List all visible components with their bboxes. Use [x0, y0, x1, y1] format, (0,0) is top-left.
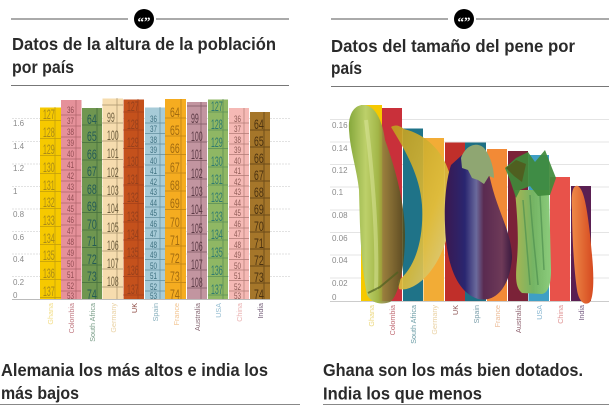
bar: USA: 132 [211, 191, 223, 206]
heading: height data [12, 34, 276, 77]
bar: Ghana: 135 [43, 249, 55, 264]
bar: Colombia: 53 [67, 291, 74, 301]
bar: USA: 131 [211, 173, 223, 188]
bar: USA: 129 [211, 136, 223, 151]
bar: Australia: 108 [191, 276, 203, 291]
bar: UK: 134 [127, 228, 139, 243]
bar: South Africa: 74 [87, 287, 97, 303]
bar: Germany: 101 [107, 147, 119, 162]
bar: Spain: 53 [150, 291, 157, 301]
y axis labels: 0.02 [332, 279, 348, 288]
bar: Colombia: 48 [67, 237, 74, 247]
caption: most and least [323, 360, 583, 404]
bar: USA: 137 [211, 283, 223, 298]
bar: Colombia [61, 100, 82, 301]
bar: Australia: 104 [191, 203, 203, 218]
bar: India: 64 [254, 117, 264, 133]
icon: eggplant [445, 145, 512, 300]
bar: Spain: 39 [150, 145, 157, 155]
bar: UK: 129 [127, 136, 139, 151]
bar: Spain: 37 [150, 124, 157, 134]
bar: France: 67 [170, 160, 180, 176]
bar: France: 71 [170, 233, 180, 249]
caption: most and least: Ghana son los más bien dotados. [323, 360, 583, 380]
bar: South Africa: 70 [87, 217, 97, 233]
bar: India [250, 112, 270, 303]
bar: Spain: 52 [150, 282, 157, 292]
bar: Colombia: 36 [67, 105, 74, 115]
country labels: size chart: Colombia [388, 305, 397, 335]
y axis labels: 1.4 [13, 142, 25, 151]
bar: Ghana: 128 [43, 126, 55, 141]
bar: Spain: 36 [150, 114, 157, 124]
bar: Spain: 51 [150, 271, 157, 281]
panel: height by country [0, 9, 300, 404]
caption: tallest and shortest: Alemania los más altos e india los [1, 360, 268, 380]
country labels: size chart: Australia [514, 305, 523, 333]
bar: Spain: 42 [150, 177, 157, 187]
bar: China: 42 [234, 177, 241, 187]
bar: Australia [187, 102, 207, 300]
bar: China: 40 [234, 156, 241, 166]
bar: France: 64 [170, 105, 180, 121]
y axis labels [13, 119, 25, 300]
bar: Colombia: 45 [67, 204, 74, 214]
y axis labels: 0.04 [332, 256, 348, 265]
bar: USA: 134 [211, 228, 223, 243]
bar: UK: 135 [127, 246, 139, 261]
bar: Australia: 102 [191, 167, 203, 182]
bar: France: 66 [170, 141, 180, 157]
panel: size by country [323, 9, 609, 404]
bar: China: 39 [234, 145, 241, 155]
bar: China: 49 [234, 250, 241, 260]
bar: Colombia: 42 [67, 171, 74, 181]
bar: Colombia: 49 [67, 248, 74, 258]
bar: South Africa: 71 [87, 234, 97, 250]
bar: Spain: 47 [150, 229, 157, 239]
divider with quote badge [11, 9, 289, 29]
bar: China: 41 [234, 166, 241, 176]
bar: Australia: 103 [191, 185, 203, 200]
bar: USA: 130 [211, 155, 223, 170]
country labels: size chart [367, 305, 586, 344]
country labels: height chart: Ghana [46, 303, 55, 325]
bar: Australia: 100 [191, 130, 203, 145]
y axis labels: 0 [332, 293, 337, 302]
bar: Germany: 107 [107, 257, 119, 272]
bar: South Africa: 72 [87, 252, 97, 268]
bars [361, 105, 591, 301]
bar: Australia: 107 [191, 258, 203, 273]
bar: UK: 136 [127, 264, 139, 279]
country labels: height chart: UK [130, 303, 139, 313]
caption: tallest and shortest [1, 360, 268, 403]
bar: Germany: 103 [107, 184, 119, 199]
bar: Ghana: 131 [43, 179, 55, 194]
bar: China: 46 [234, 219, 241, 229]
bar: Germany: 100 [107, 129, 119, 144]
bar: Spain: 46 [150, 219, 157, 229]
bar: Colombia: 44 [67, 193, 75, 203]
caption: tallest and shortest: más bajos [1, 383, 79, 403]
y axis labels: 0.12 [332, 166, 348, 175]
bar: Spain [145, 107, 165, 301]
bar: South Africa: 67 [87, 164, 97, 180]
bar: South Africa [82, 108, 102, 303]
bar: France: 69 [170, 196, 180, 212]
bar: Spain: 40 [150, 156, 157, 166]
divider with quote badge [331, 9, 609, 29]
y axis labels: 0.1 [332, 188, 344, 197]
bar: Colombia: 38 [67, 127, 74, 137]
icon: cucumber [349, 105, 405, 304]
bar: India: 71 [254, 236, 264, 252]
bar: South Africa: 66 [87, 147, 97, 163]
country labels: height chart: Colombia [67, 303, 76, 333]
icon: banana [391, 126, 452, 289]
bar: Germany [102, 98, 123, 300]
bar: Germany: 99 [107, 111, 115, 126]
country labels: height chart: Australia [193, 303, 202, 331]
bar: China: 52 [234, 282, 241, 292]
bar: China: 36 [234, 114, 241, 124]
bar: India: 72 [254, 253, 264, 269]
bar: China: 48 [234, 240, 241, 250]
bar: Spain: 45 [150, 208, 157, 218]
bar: USA [208, 99, 228, 300]
bar: Colombia: 50 [67, 259, 74, 269]
country labels: size chart: UK [451, 305, 460, 315]
bar: Ghana: 130 [43, 161, 55, 176]
y axis labels: 0.2 [13, 278, 25, 287]
country labels: height chart: South Africa [88, 303, 97, 342]
y axis labels: 1.2 [13, 164, 25, 173]
bar: UK: 130 [127, 155, 139, 170]
heading: height data: Datos de la altura de la población [12, 34, 276, 54]
bar: China: 51 [234, 271, 241, 281]
bar: China: 37 [234, 124, 241, 134]
bar: UK [123, 99, 144, 300]
bar: Spain: 41 [150, 166, 157, 176]
bar: Australia: 105 [191, 222, 203, 237]
bar: China: 53 [234, 291, 241, 301]
bar: Spain: 50 [150, 261, 157, 271]
y axis labels: 0.06 [332, 234, 348, 243]
bar: India: 65 [254, 134, 264, 150]
bar: China: 38 [234, 135, 241, 145]
y axis labels: 1 [13, 187, 18, 196]
country labels: height chart [46, 303, 265, 342]
bar: USA: 133 [211, 210, 223, 225]
country labels: size chart: USA [535, 305, 544, 320]
y axis labels [332, 121, 348, 302]
bar: India: 68 [254, 185, 264, 201]
bar: China: 43 [234, 187, 241, 197]
bar: China [229, 108, 249, 301]
bar: South Africa: 65 [87, 129, 97, 145]
y axis labels: 1.6 [13, 119, 25, 128]
icon: carrot [572, 186, 593, 304]
bar: Colombia: 41 [67, 160, 74, 170]
bar: UK: 133 [127, 210, 139, 225]
bar: Germany: 104 [107, 202, 119, 217]
bar: UK: 132 [127, 191, 139, 206]
bar: Ghana: 137 [43, 285, 55, 300]
bar: France: 68 [170, 178, 180, 194]
bar: USA: 128 [211, 118, 223, 133]
bar: India: 67 [254, 168, 264, 184]
y axis labels: 0.08 [332, 211, 348, 220]
bar: UK: 137 [127, 283, 139, 298]
heading: size data: Datos del tamaño del pene por [331, 36, 575, 56]
country labels: size chart: South Africa [409, 305, 418, 344]
country labels: size chart: Ghana [367, 305, 376, 327]
bar: Colombia: 40 [67, 149, 74, 159]
bar: Colombia: 39 [67, 138, 74, 148]
country labels: height chart: China [235, 303, 244, 322]
bar: Ghana: 127 [43, 108, 55, 123]
bar: South Africa: 64 [87, 112, 97, 128]
bar: France: 65 [170, 123, 180, 139]
bar: USA: 136 [211, 264, 223, 279]
bar: Colombia: 47 [67, 226, 74, 236]
bar: India: 69 [254, 202, 264, 218]
country labels: height chart: USA [214, 303, 223, 318]
bar: France: 72 [170, 251, 180, 267]
bar: China: 47 [234, 229, 241, 239]
bar: South Africa: 69 [87, 199, 97, 215]
bar: South Africa: 68 [87, 182, 97, 198]
bar: France: 70 [170, 215, 180, 231]
heading: size data: país [331, 58, 362, 78]
bar: Colombia: 37 [67, 116, 74, 126]
divider with quote badge: “” [138, 14, 150, 29]
bar: Spain: 38 [150, 135, 157, 145]
bar: India: 74 [254, 287, 264, 303]
country labels: size chart: France [493, 305, 502, 327]
country labels: height chart: Germany [109, 303, 118, 333]
bar: Australia: 99 [191, 112, 199, 127]
bar: India: 66 [254, 151, 264, 167]
bar: India: 70 [254, 219, 264, 235]
y axis labels: 0.6 [13, 233, 25, 242]
bar: France [165, 99, 186, 303]
country labels: height chart: India [256, 303, 265, 319]
country labels: height chart: Spain [151, 303, 160, 321]
icon: celery [505, 150, 556, 294]
bar: Australia: 101 [191, 148, 203, 163]
divider with quote badge: “” [458, 14, 470, 29]
bar: France: 73 [170, 269, 180, 285]
bar: China: 50 [234, 261, 241, 271]
bar: Spain: 48 [150, 240, 157, 250]
bar: UK: 131 [127, 173, 139, 188]
bar: UK: 128 [127, 118, 139, 133]
bar: Australia: 106 [191, 240, 203, 255]
bar: Ghana: 132 [43, 196, 55, 211]
y axis labels: 0.14 [332, 144, 348, 153]
bar: USA: 127 [211, 100, 223, 115]
heading: size data [331, 36, 575, 78]
bar: Ghana: 129 [43, 143, 55, 158]
y axis labels: 0.4 [13, 255, 25, 264]
bar: Colombia: 52 [67, 281, 74, 291]
bar: France: 74 [170, 287, 180, 303]
bar: Spain: 49 [150, 250, 157, 260]
bar: Germany: 106 [107, 239, 119, 254]
bar: Colombia: 51 [67, 270, 74, 280]
bar: Germany: 108 [107, 275, 119, 290]
y axis labels: 0.16 [332, 121, 348, 130]
bar: Colombia: 46 [67, 215, 74, 225]
bar: Ghana: 134 [43, 232, 55, 247]
heading: height data: por país [12, 57, 74, 77]
caption: most and least: India los que menos [323, 384, 482, 404]
country labels: size chart: China [556, 305, 565, 324]
country labels: size chart: Germany [430, 305, 439, 335]
bar: India: 73 [254, 270, 264, 286]
bar: USA: 135 [211, 246, 223, 261]
y axis labels: 0 [13, 291, 18, 300]
bar: South Africa: 73 [87, 269, 97, 285]
country labels: size chart: Spain [472, 305, 481, 323]
bar: Ghana: 136 [43, 267, 55, 282]
bar: Spain: 43 [150, 187, 157, 197]
bar: Ghana [40, 107, 61, 300]
bar: Spain: 44 [150, 198, 158, 208]
country labels: height chart: France [172, 303, 181, 325]
bar: China: 44 [234, 198, 242, 208]
bar: Germany: 102 [107, 166, 119, 181]
country labels: size chart: India [577, 305, 586, 321]
bar: Colombia: 43 [67, 182, 74, 192]
y axis labels: 0.8 [13, 210, 25, 219]
bar: Germany: 105 [107, 221, 119, 236]
bar: China: 45 [234, 208, 241, 218]
bar: Ghana: 133 [43, 214, 55, 229]
bar: UK: 127 [127, 100, 139, 115]
